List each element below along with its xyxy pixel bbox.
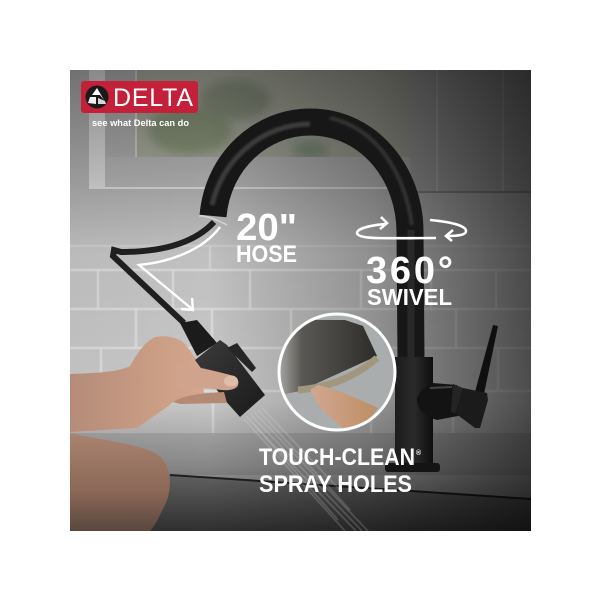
Delta logo	[81, 81, 198, 113]
faucet	[199, 118, 498, 472]
infographic	[70, 70, 531, 531]
countertop	[70, 433, 531, 475]
vertical shading	[70, 70, 531, 531]
faucet base	[385, 463, 440, 472]
spray holes face	[298, 358, 377, 390]
sink edge and basin	[150, 474, 531, 531]
window frame	[89, 70, 410, 189]
swivel label: 360°	[366, 250, 453, 292]
handle body	[417, 383, 488, 428]
hose	[113, 222, 214, 323]
photo background	[70, 70, 531, 531]
swivel label: SWIVEL	[367, 284, 452, 310]
spray holes label: TOUCH-CLEAN	[259, 444, 415, 471]
faucet collar	[395, 357, 433, 463]
logo emblem	[86, 86, 108, 108]
nozzle barrel	[280, 320, 377, 394]
spray water	[244, 408, 368, 531]
hand upper	[70, 336, 205, 432]
spray holes label: ®	[416, 449, 422, 457]
white hose arrow	[139, 227, 220, 310]
window artwork	[135, 70, 410, 159]
tagline: see what Delta can do	[92, 118, 189, 129]
hose length label	[236, 207, 297, 268]
circle inset spray nozzle	[270, 314, 395, 430]
fingers and thumb	[173, 364, 238, 404]
dark cabinet panels	[417, 191, 531, 193]
spout arc	[199, 118, 412, 360]
fingertip	[310, 385, 378, 428]
logo wordmark: DELTA	[113, 84, 193, 112]
lever handle	[475, 325, 498, 394]
swivel arrows	[357, 217, 466, 241]
hand lower	[70, 433, 170, 531]
hose length label: 20"	[236, 207, 297, 249]
hose length label: HOSE	[236, 241, 297, 268]
spray holes label	[259, 444, 422, 498]
spray head	[180, 320, 265, 417]
spray holes label: SPRAY HOLES	[259, 471, 412, 498]
horizontal shading	[233, 70, 531, 531]
tile grout lines	[70, 245, 531, 433]
